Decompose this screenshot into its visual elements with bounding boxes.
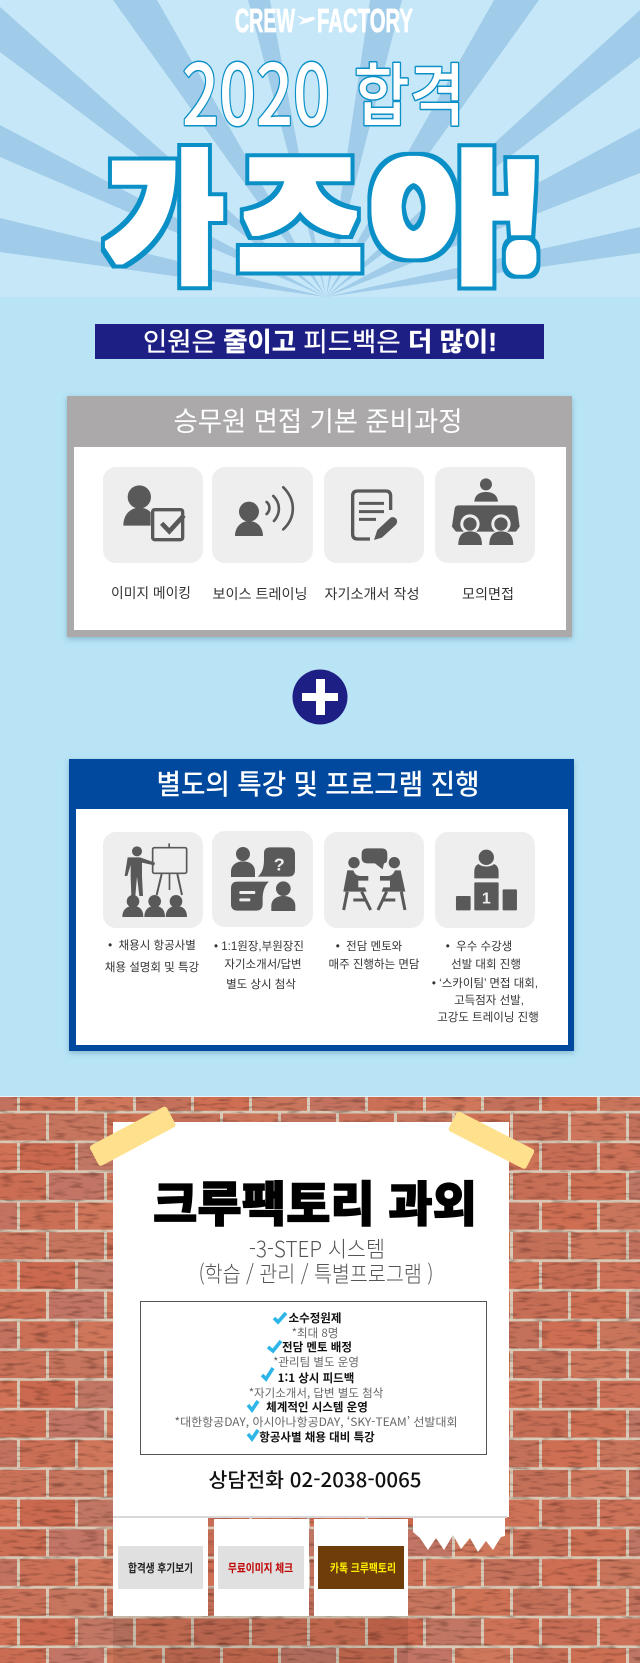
tab: kakao: 카톡 크루팩토리 (330, 1561, 396, 1575)
panel: basic preparation (67, 396, 572, 637)
list text: 항공사별 채용 대비 특강 (259, 1429, 375, 1445)
text: column 2: • 1:1원장,부원장진 (214, 939, 304, 953)
headline: 2020 합격: 2020 (182, 29, 330, 150)
text: column 4 (432, 940, 539, 1024)
subtitle: -3-STEP 시스템 (249, 1232, 385, 1264)
headline: 가즈아! (106, 105, 545, 311)
icon tiles (103, 467, 535, 563)
text: column 4: 고득점자 선발, (454, 994, 524, 1007)
title: 크루팩토리 과외 (153, 1165, 477, 1235)
text: column 3 (328, 940, 420, 971)
text: column 3: 매주 진행하는 면담 (328, 957, 420, 971)
icon: one-on-one feedback: ? (274, 854, 285, 874)
tab: image check (214, 1519, 309, 1616)
headline: 2020 합격 (182, 29, 465, 150)
icon: mentor meeting (343, 848, 405, 910)
list text (174, 1310, 458, 1445)
icon tiles (103, 831, 535, 928)
panel: special programs (69, 759, 574, 1051)
tab: kakao (314, 1519, 408, 1616)
logo: CREW FACTORY: FACTORY (317, 2, 413, 39)
text: column 4: 선발 대회 진행 (451, 958, 521, 971)
text: column 3: • 전담 멘토와 (336, 940, 403, 953)
list text: 체계적인 시스템 운영 (266, 1399, 368, 1415)
icon: mock interview (452, 478, 520, 545)
heading: special programs: 별도의 특강 및 프로그램 진행 (156, 769, 480, 800)
phone: 상담전화 02-2038-0065 (208, 1464, 422, 1493)
tab shadows (113, 1616, 408, 1663)
labels: 이미지 메이킹 (111, 585, 191, 601)
headline: 가즈아!: 가 (106, 105, 223, 311)
text: column 2: 별도 상시 첨삭 (226, 978, 296, 991)
paper notice (89, 1106, 535, 1518)
list text: 1:1 상시 피드백 (278, 1370, 354, 1386)
text: column 4: 고강도 트레이닝 진행 (437, 1011, 539, 1024)
headline: 가즈아!: 즈 (238, 105, 362, 311)
text: column 2: 자기소개서/답변 (224, 958, 302, 971)
headline: 2020 합격: 합격 (354, 41, 465, 140)
logo: CREW FACTORY (235, 2, 413, 39)
text: column 1 (105, 939, 200, 974)
torn tab remnant (413, 1518, 505, 1552)
headline: 가즈아!: ! (497, 105, 545, 311)
brick wall background (0, 1096, 640, 1663)
subtitle second line: (학습 / 관리 / 특별프로그램 ) (198, 1257, 434, 1289)
list text: *관리팀 별도 운영 (273, 1354, 359, 1370)
banner: 인원은 줄이고 피드백은 더 많이! (143, 327, 497, 357)
tab: image check: 무료이미지 체크 (228, 1562, 293, 1575)
system box (140, 1302, 486, 1454)
text: column 4: • 우수 수강생 (446, 940, 512, 953)
icon: presentation (122, 843, 187, 917)
list text: 소수정원제 (289, 1310, 341, 1326)
tear-off tabs (113, 1518, 505, 1663)
labels: 보이스 트레이닝 (212, 586, 308, 602)
icon: cover letter (353, 491, 397, 540)
checkmarks (248, 1313, 286, 1439)
icon: voice training (235, 487, 293, 536)
icon: podium: 1 (482, 890, 491, 907)
tab: reviews (113, 1518, 208, 1616)
tape left (89, 1106, 176, 1167)
tape right (448, 1111, 535, 1170)
labels: 자기소개서 작성 (324, 586, 420, 602)
logo: CREW FACTORY: CREW (235, 2, 296, 39)
icon: plus (292, 670, 348, 724)
tab: reviews: 합격생 후기보기 (128, 1561, 193, 1575)
headline: 가즈아!: 아 (369, 106, 511, 311)
text: column 1: 채용 설명회 및 특강 (105, 961, 200, 974)
list text: 전담 멘토 배정 (282, 1339, 352, 1355)
heading: basic preparation: 승무원 면접 기본 준비과정 (174, 407, 462, 437)
text: column 2 (214, 939, 304, 991)
labels: 모의면접 (462, 586, 514, 602)
icon: one-on-one feedback (231, 847, 295, 911)
page background (0, 0, 640, 1097)
list text: *대한항공DAY, 아시아나항공DAY, ‘SKY-TEAM’ 선발대회 (174, 1414, 458, 1430)
hero sunburst background (0, 0, 640, 297)
labels (111, 585, 514, 602)
text: column 4: • ‘스카이팀’ 면접 대회, (432, 977, 538, 990)
text: column 1: • 채용시 항공사별 (108, 939, 196, 952)
icon: image making (123, 485, 185, 542)
icon: plane (298, 16, 315, 24)
list text: *최대 8명 (292, 1325, 338, 1341)
icon: podium (456, 850, 517, 910)
list text: *자기소개서, 답변 별도 첨삭 (249, 1385, 384, 1401)
banner (95, 324, 544, 359)
